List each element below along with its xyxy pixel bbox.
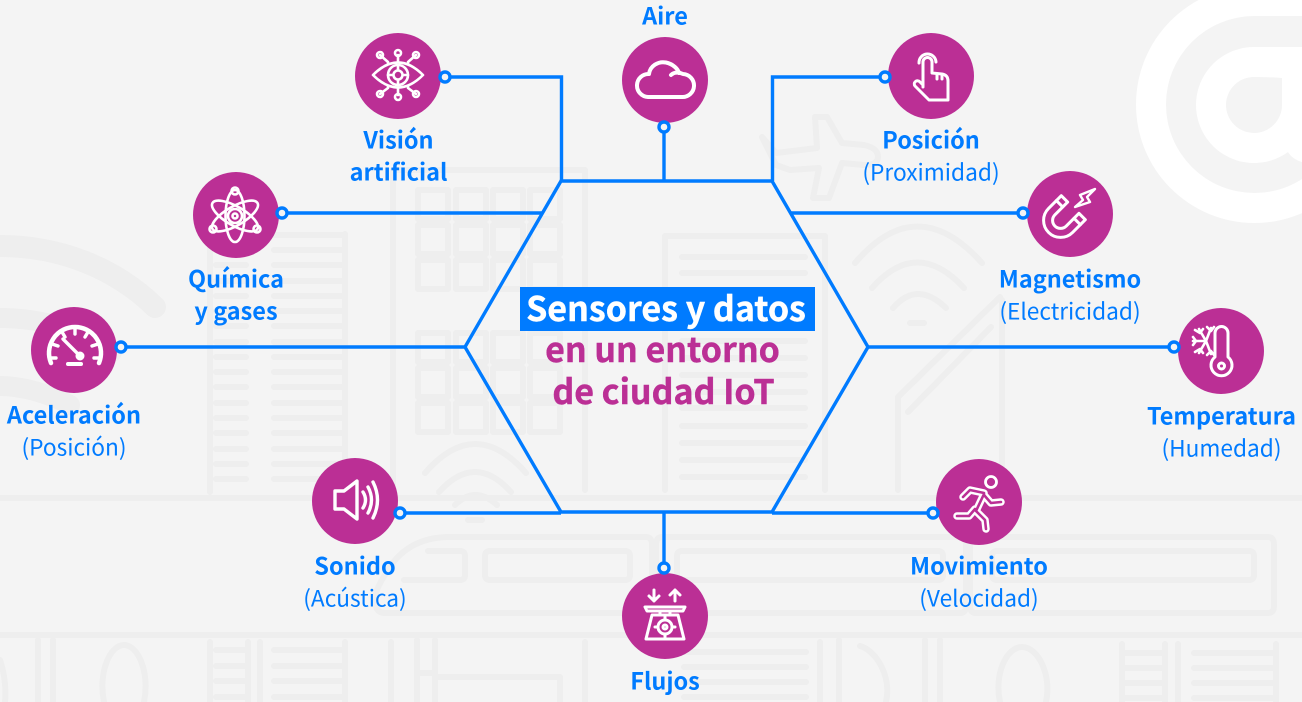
icon: magnet — [1037, 189, 1095, 244]
icon: atom — [208, 188, 262, 242]
sensor: visión artificial — [350, 33, 450, 188]
sensor: sonido: (Acústica) — [303, 580, 407, 614]
sensor: flujos — [622, 563, 708, 696]
icon: running person — [957, 476, 1001, 529]
icon: eye with circuits — [373, 50, 423, 100]
sensor: temperatura: Temperatura — [1147, 398, 1296, 432]
sensor: química y gases: y gases — [194, 292, 278, 326]
icon: weighing scale with arrows — [645, 590, 685, 639]
sensor: visión artificial: Visión — [362, 122, 434, 156]
sensor: aire — [622, 0, 708, 132]
sensor: química y gases: Química — [188, 260, 284, 294]
sensor: movimiento: Movimiento — [910, 548, 1048, 582]
sensor: aceleración: (Posición) — [21, 430, 127, 462]
background: white at sign — [1136, 0, 1302, 223]
title: Sensores y datos — [526, 282, 806, 331]
icon: touching hand — [914, 54, 948, 100]
sensor: magnetismo — [999, 171, 1141, 326]
sensor: flujos: Flujos — [630, 662, 700, 696]
icon: cloud — [637, 62, 694, 97]
sensor: temperatura — [1147, 308, 1296, 464]
icon: speedometer — [49, 327, 101, 364]
sensor: aceleración: Aceleración — [6, 396, 141, 430]
sensor: posición: Posición — [882, 122, 980, 156]
sensor: sonido — [303, 458, 407, 614]
sensor: movimiento — [910, 459, 1048, 614]
icon: thermometer and snowflake — [1193, 326, 1232, 376]
sensor: movimiento: (Velocidad) — [919, 580, 1039, 614]
sensor: magnetismo: (Electricidad) — [999, 294, 1141, 326]
sensor: posición: (Proximidad) — [862, 154, 1000, 188]
connector lines and central hexagon — [121, 77, 1174, 568]
title: de ciudad IoT — [552, 365, 775, 414]
title — [520, 282, 815, 414]
sensor: aceleración — [6, 307, 141, 462]
sensor: sonido: Sonido — [314, 548, 396, 582]
sensor: química y gases — [188, 172, 287, 326]
title: en un entorno — [545, 323, 780, 372]
sensor: posición — [862, 33, 1000, 188]
icon: speaker — [335, 481, 378, 519]
sensor: temperatura: (Humedad) — [1161, 430, 1282, 464]
sensor: visión artificial: artificial — [350, 154, 447, 188]
sensor: magnetismo: Magnetismo — [999, 260, 1141, 294]
